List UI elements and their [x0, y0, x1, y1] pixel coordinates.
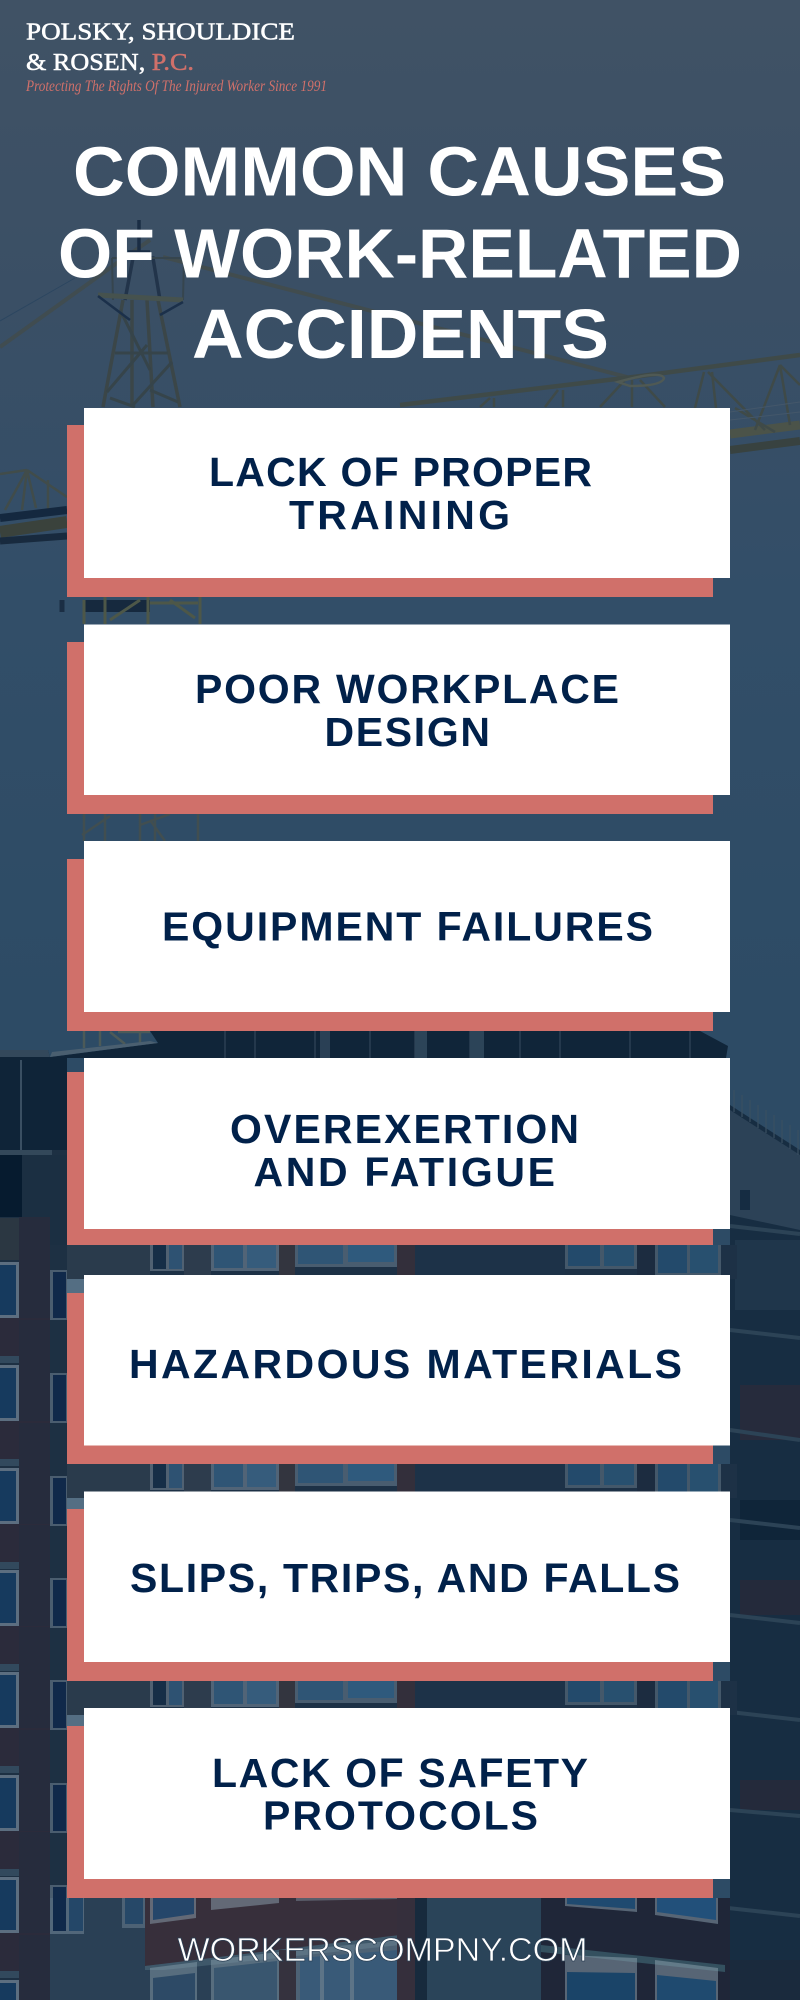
- building, central upper: [0, 1031, 728, 1058]
- card 3: equipment failures: EQUIPMENT FAILURES: [162, 904, 653, 950]
- card 1: lack of proper training: LACK OF PROPER: [209, 449, 592, 495]
- card 5: hazardous materials: HAZARDOUS MATERIALS: [129, 1341, 682, 1387]
- card 5: hazardous materials: [67, 1275, 730, 1464]
- card 4: overexertion and fatigue: OVEREXERTION: [230, 1106, 579, 1152]
- title: ACCIDENTS: [192, 295, 609, 373]
- card 1: lack of proper training: [67, 408, 730, 597]
- card 7: lack of safety protocols: LACK OF SAFETY: [212, 1750, 588, 1796]
- card 6: slips, trips, and falls: [67, 1492, 730, 1681]
- lower windows left: [145, 1970, 205, 2000]
- brown curved band: [145, 1898, 415, 1966]
- logo line 1: POLSKY, SHOULDICE: [26, 20, 295, 46]
- right wing of the bottom building: [541, 1898, 730, 2000]
- title: [58, 132, 742, 373]
- building, centre rows: [67, 1245, 737, 1279]
- card 2: poor workplace design: POOR WORKPLACE: [195, 666, 619, 712]
- left strip: [0, 1057, 67, 2000]
- card 2: poor workplace design: DESIGN: [324, 709, 490, 755]
- building, bottom: [50, 1898, 730, 2000]
- left jib: [0, 470, 67, 510]
- tower below first cards: [85, 600, 150, 612]
- crane: [0, 220, 800, 1048]
- right strip: [730, 1105, 800, 2000]
- card 4: overexertion and fatigue: [67, 1058, 730, 1245]
- card 1: lack of proper training: TRAINING: [289, 492, 510, 538]
- card 6: slips, trips, and falls: SLIPS, TRIPS, AND FALLS: [130, 1555, 680, 1601]
- title: OF WORK-RELATED: [58, 214, 742, 292]
- right jib: [730, 425, 800, 434]
- footer website: WORKERSCOMPNY.COM: [178, 1932, 588, 1969]
- logo: [25, 20, 327, 95]
- card 7: lack of safety protocols: [67, 1708, 730, 1898]
- card 2: poor workplace design: [67, 624, 730, 814]
- card 3: equipment failures: [67, 841, 730, 1031]
- title: COMMON CAUSES: [73, 132, 726, 210]
- logo tagline: Protecting The Rights Of The Injured Worker Since 1991: [25, 78, 327, 95]
- logo line 2: & ROSEN, P.C.: [26, 50, 194, 76]
- card 7: lack of safety protocols: PROTOCOLS: [263, 1792, 538, 1838]
- card 4: overexertion and fatigue: AND FATIGUE: [254, 1149, 555, 1195]
